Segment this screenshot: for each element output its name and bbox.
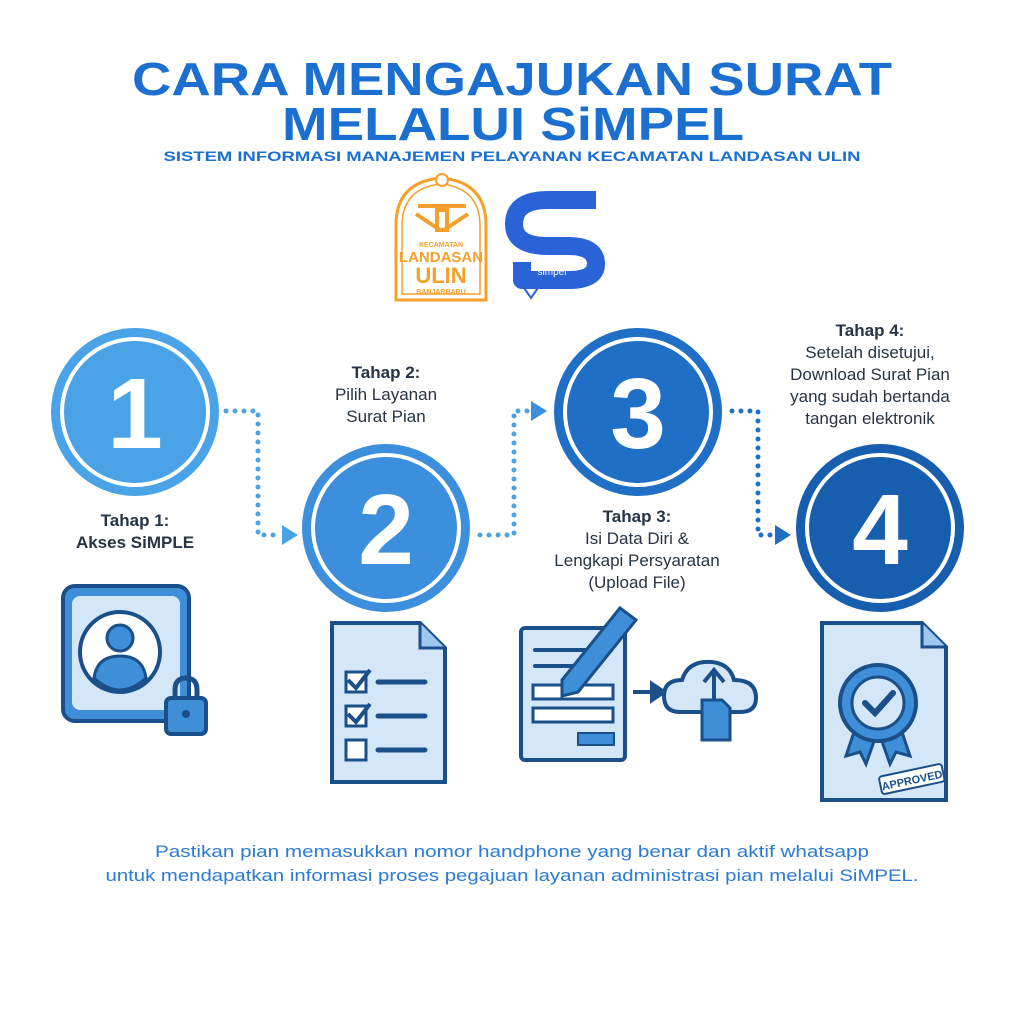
footer note xyxy=(106,842,918,885)
label step 2: Surat Pian xyxy=(346,407,426,426)
step 2 circle xyxy=(302,444,470,612)
logo: simpel: simpel xyxy=(538,267,566,278)
label step 1 xyxy=(76,511,194,552)
label step 4: Download Surat Pian xyxy=(790,365,950,384)
logo: kecamatan landasan ulin: ULIN xyxy=(415,263,467,288)
label step 2: Pilih Layanan xyxy=(335,385,437,404)
logo: simpel xyxy=(514,200,596,298)
logo: kecamatan landasan ulin: KECAMATAN xyxy=(419,242,463,249)
icon: user profile with lock xyxy=(63,586,206,734)
label step 3 xyxy=(554,507,720,592)
icon: cloud upload xyxy=(664,662,756,740)
footer note: untuk mendapatkan informasi proses pegajuan layanan administrasi pian melalui SiMPEL. xyxy=(106,866,918,885)
step 1 circle xyxy=(51,328,219,496)
connectors: dotted arrows xyxy=(226,411,772,535)
label step 3: Lengkapi Persyaratan xyxy=(554,551,720,570)
label step 3: (Upload File) xyxy=(588,573,686,592)
label step 4: Tahap 4: xyxy=(836,321,904,340)
label step 2 xyxy=(335,363,437,426)
label step 4: Setelah disetujui, xyxy=(805,343,935,362)
label step 4 xyxy=(790,321,950,428)
arrowheads xyxy=(282,401,791,545)
step 4 circle: 4 xyxy=(852,474,908,586)
logo: kecamatan landasan ulin: LANDASAN xyxy=(399,249,483,266)
label step 3: Isi Data Diri & xyxy=(585,529,690,548)
logo: kecamatan landasan ulin: BANJARBARU xyxy=(416,289,466,296)
logo: kecamatan landasan ulin xyxy=(396,174,486,300)
icon: checklist document xyxy=(332,623,445,782)
step 2 circle: 2 xyxy=(358,474,414,586)
icon: form with pencil xyxy=(521,608,636,760)
label step 1: Akses SiMPLE xyxy=(76,533,194,552)
subtitle: SISTEM INFORMASI MANAJEMEN PELAYANAN KECAMATAN LANDASAN ULIN xyxy=(164,148,860,164)
step 1 circle: 1 xyxy=(107,358,163,470)
title: CARA MENGAJUKAN SURAT xyxy=(132,53,892,105)
title xyxy=(132,53,892,150)
step 4 circle xyxy=(796,444,964,612)
footer note: Pastikan pian memasukkan nomor handphone yang benar dan aktif whatsapp xyxy=(155,842,869,861)
label step 3: Tahap 3: xyxy=(603,507,671,526)
icon: approved document with badge xyxy=(822,623,946,800)
label step 4: yang sudah bertanda xyxy=(790,387,950,406)
title: MELALUI SiMPEL xyxy=(282,98,744,150)
arrow: to cloud xyxy=(633,684,664,700)
icon: approved document with badge: APPROVED xyxy=(881,769,944,793)
step 3 circle: 3 xyxy=(610,358,666,470)
label step 1: Tahap 1: xyxy=(101,511,169,530)
step 3 circle xyxy=(554,328,722,496)
label step 2: Tahap 2: xyxy=(352,363,420,382)
label step 4: tangan elektronik xyxy=(805,409,935,428)
